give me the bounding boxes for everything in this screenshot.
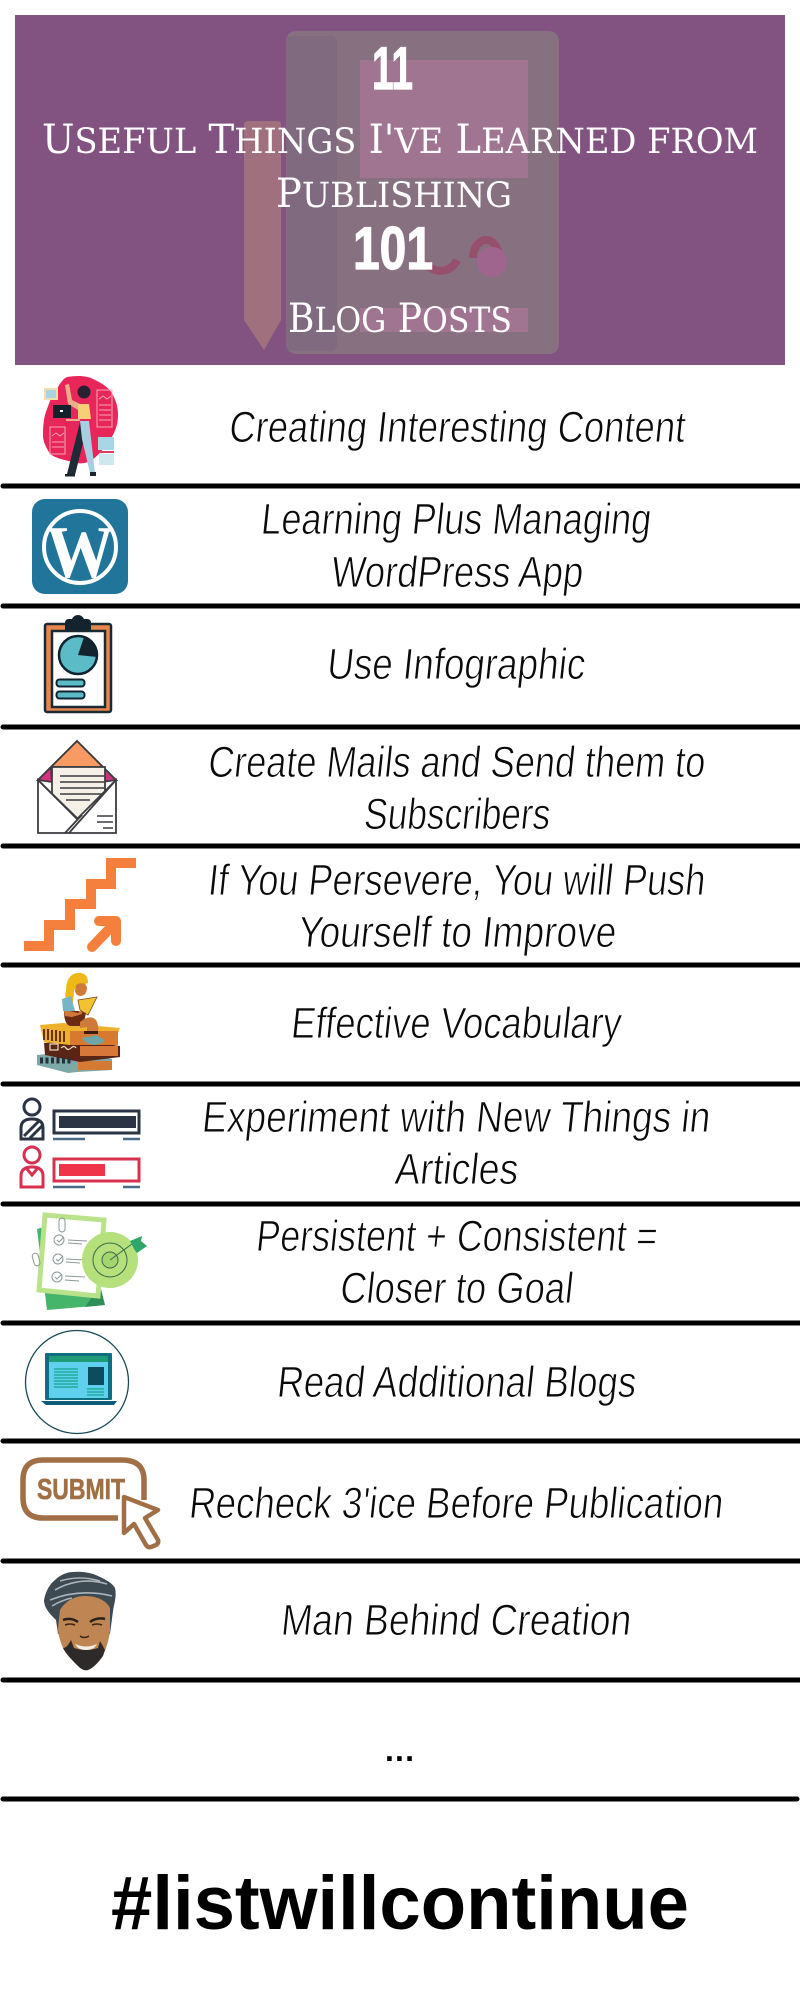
- row text: Man Behind Creation: Man Behind Creation: [279, 1596, 634, 1645]
- icon: clipboard with pie chart: [45, 615, 111, 712]
- icon: submit button with cursor: SUBMIT: [37, 1474, 125, 1506]
- row text: Creating Interesting Content: Creating Interesting Content: [227, 403, 688, 452]
- icon: submit button with cursor: [23, 1460, 158, 1547]
- title line: Blog Posts: BLOG POSTS: [288, 296, 512, 342]
- icon: WordPress logo: [32, 499, 128, 594]
- illustration: faded pencil: [244, 121, 281, 350]
- illustration: faded tablet: [286, 31, 559, 354]
- row text: If You Persevere, You will Push Yourself to Improve: Yourself to Improve: [296, 908, 619, 957]
- icon: checklist and target: [32, 1215, 147, 1310]
- icon: portrait of the author: [44, 1572, 116, 1670]
- icon: laptop in circle: [26, 1330, 128, 1434]
- icon: woman with laptop: [43, 376, 118, 476]
- row text: Create Mails and Send them to Subscribers: [206, 738, 708, 839]
- icon: WordPress logo: W: [46, 512, 114, 594]
- row text: Create Mails and Send them to Subscribers: Subscribers: [362, 790, 553, 839]
- row text: Experiment with New Things in Articles: [200, 1093, 713, 1194]
- panel: title banner: [15, 15, 785, 365]
- title line: Useful Things I've Learned from Publishing: USEFUL THINGS I'VE LEARNED FROM: [42, 117, 758, 163]
- closing hashtag: #listwillcontinue: [111, 1861, 689, 1946]
- icon: open envelope: [38, 741, 116, 833]
- row text: Experiment with New Things in Articles: Experiment with New Things in: [200, 1093, 713, 1142]
- ellipsis: ...: [385, 1732, 414, 1768]
- row text: If You Persevere, You will Push Yourself to Improve: If You Persevere, You will Push: [206, 856, 708, 905]
- title number 101: 101: [353, 215, 433, 282]
- icon: girl reading on books: [37, 973, 120, 1073]
- row text: Persistent + Consistent = Closer to Goal: Closer to Goal: [338, 1264, 576, 1313]
- icon: two people with progress bars: [21, 1099, 140, 1187]
- row text: If You Persevere, You will Push Yourself to Improve: [206, 856, 708, 957]
- row text: Learning Plus Managing WordPress App: WordPress App: [329, 548, 586, 597]
- row text: Persistent + Consistent = Closer to Goal: Persistent + Consistent =: [254, 1212, 660, 1261]
- row text: Learning Plus Managing WordPress App: Learning Plus Managing: [259, 495, 654, 544]
- title number 11: 11: [372, 35, 413, 102]
- row text: Create Mails and Send them to Subscribers: Create Mails and Send them to: [206, 738, 708, 787]
- title line: Useful Things I've Learned from Publishing: PUBLISHING: [276, 171, 512, 217]
- row text: Persistent + Consistent = Closer to Goal: [254, 1212, 660, 1313]
- title line: Useful Things I've Learned from Publishing: [42, 117, 758, 217]
- row text: Use Infographic: Use Infographic: [325, 640, 588, 689]
- row text: Read Additional Blogs: Read Additional Blogs: [275, 1358, 639, 1407]
- row text: Experiment with New Things in Articles: Articles: [393, 1145, 521, 1194]
- row text: Learning Plus Managing WordPress App: [259, 495, 654, 597]
- icon: orange stairs with arrow: [24, 863, 136, 947]
- row text: Effective Vocabulary: Effective Vocabulary: [289, 999, 624, 1048]
